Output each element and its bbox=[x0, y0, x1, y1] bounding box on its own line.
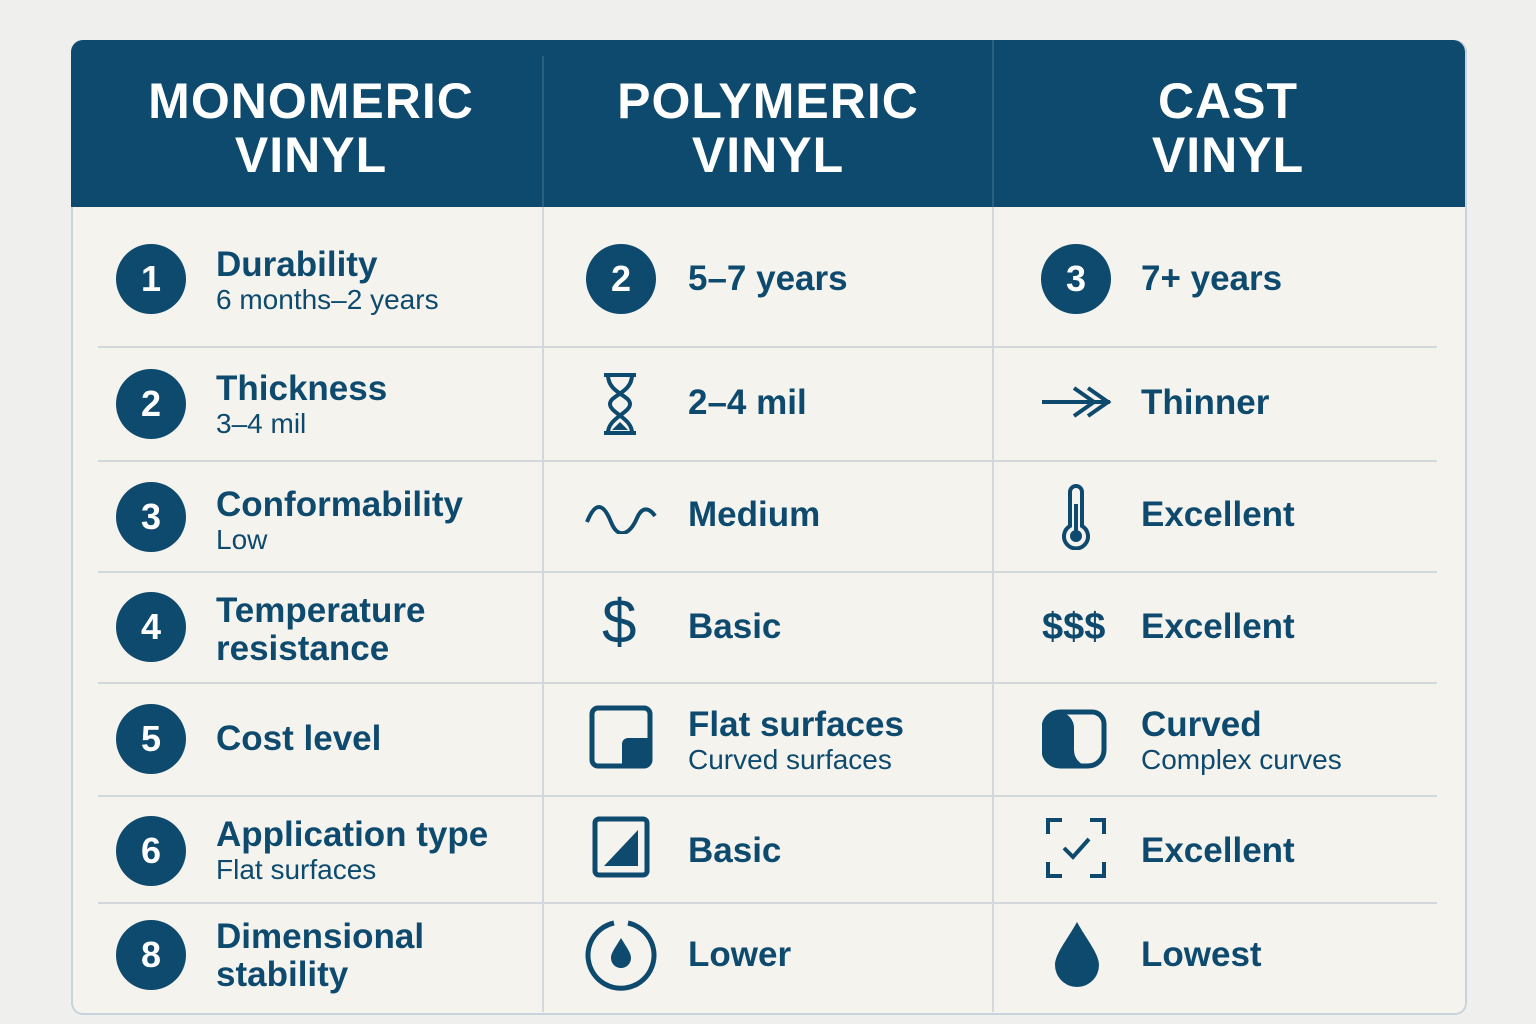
icon: $$$: $$$ bbox=[1042, 606, 1105, 648]
icon: hourglass bbox=[604, 373, 636, 435]
row 5: cost: Complex curves bbox=[1141, 744, 1342, 775]
row 4: temperature: Excellent bbox=[1141, 607, 1295, 646]
row 7: dimensional stability: 8 bbox=[141, 934, 161, 975]
icon: square with triangle bbox=[592, 816, 650, 878]
row 5: cost: Cost level bbox=[216, 719, 381, 758]
header: polymeric: VINYL bbox=[692, 127, 844, 183]
row 7: dimensional stability: stability bbox=[216, 955, 348, 994]
row 6: application: Basic bbox=[688, 831, 781, 870]
row 6: application: 6 bbox=[141, 830, 161, 871]
row 6: application bbox=[116, 815, 1295, 886]
header: cast: VINYL bbox=[1152, 127, 1304, 183]
icon: arrows bbox=[1042, 386, 1112, 418]
row 4: temperature bbox=[116, 588, 1295, 668]
row 1: durability: 5–7 years bbox=[688, 259, 848, 298]
row 2: thickness: 2–4 mil bbox=[688, 383, 807, 422]
header: monomeric: MONOMERIC bbox=[148, 73, 474, 129]
header bar bbox=[71, 40, 1465, 207]
icon: dashed check bbox=[1046, 818, 1106, 878]
row 1: durability bbox=[116, 244, 1282, 315]
row 1: durability: 6 months–2 years bbox=[216, 284, 439, 315]
icon: curved shape bbox=[1042, 710, 1106, 768]
header: monomeric: VINYL bbox=[235, 127, 387, 183]
row 5: cost: Curved bbox=[1141, 705, 1262, 744]
row 3: conformability: Excellent bbox=[1141, 495, 1295, 534]
row 4: temperature: resistance bbox=[216, 629, 389, 668]
icon: dollar: $ bbox=[602, 588, 636, 657]
row 2: thickness: 2 bbox=[141, 383, 161, 424]
icon: drop in circle bbox=[586, 920, 656, 991]
row 2: thickness: Thinner bbox=[1141, 383, 1269, 422]
row 2: thickness: 3–4 mil bbox=[216, 408, 306, 439]
header: cast bbox=[1152, 73, 1304, 183]
header: polymeric: POLYMERIC bbox=[617, 73, 919, 129]
row 3: conformability: Conformability bbox=[216, 485, 463, 524]
row 4: temperature: Basic bbox=[688, 607, 781, 646]
row 7: dimensional stability: Lower bbox=[688, 935, 791, 974]
row 7: dimensional stability: Dimensional bbox=[216, 917, 424, 956]
header: cast: CAST bbox=[1158, 73, 1298, 129]
row 7: dimensional stability bbox=[116, 917, 1262, 994]
icon: thermometer bbox=[1062, 484, 1090, 550]
row 3: conformability bbox=[116, 482, 1295, 555]
row 1: durability: 3 bbox=[1066, 258, 1086, 299]
row 7: dimensional stability: Lowest bbox=[1141, 935, 1262, 974]
row 3: conformability: Low bbox=[216, 524, 267, 555]
row 3: conformability: 3 bbox=[141, 496, 161, 537]
row 5: cost: Flat surfaces bbox=[688, 705, 904, 744]
icon: drop bbox=[1055, 922, 1099, 987]
row 5: cost bbox=[116, 704, 1342, 775]
row 2: thickness bbox=[116, 369, 1269, 439]
row 3: conformability: Medium bbox=[688, 495, 820, 534]
header: monomeric bbox=[148, 73, 474, 183]
row 6: application: Application type bbox=[216, 815, 488, 854]
row 6: application: Flat surfaces bbox=[216, 854, 376, 885]
row 5: cost: Curved surfaces bbox=[688, 744, 892, 775]
header: polymeric bbox=[617, 73, 919, 183]
row 1: durability: 1 bbox=[141, 258, 161, 299]
row 6: application: Excellent bbox=[1141, 831, 1295, 870]
icon: wave bbox=[585, 505, 657, 534]
row 2: thickness: Thickness bbox=[216, 369, 387, 408]
row 4: temperature: Temperature bbox=[216, 591, 425, 630]
row 5: cost: 5 bbox=[141, 718, 161, 759]
row 1: durability: 7+ years bbox=[1141, 259, 1282, 298]
icon: square bbox=[590, 706, 652, 768]
row 1: durability: 2 bbox=[611, 258, 631, 299]
row 4: temperature: 4 bbox=[141, 606, 161, 647]
row 1: durability: Durability bbox=[216, 245, 377, 284]
